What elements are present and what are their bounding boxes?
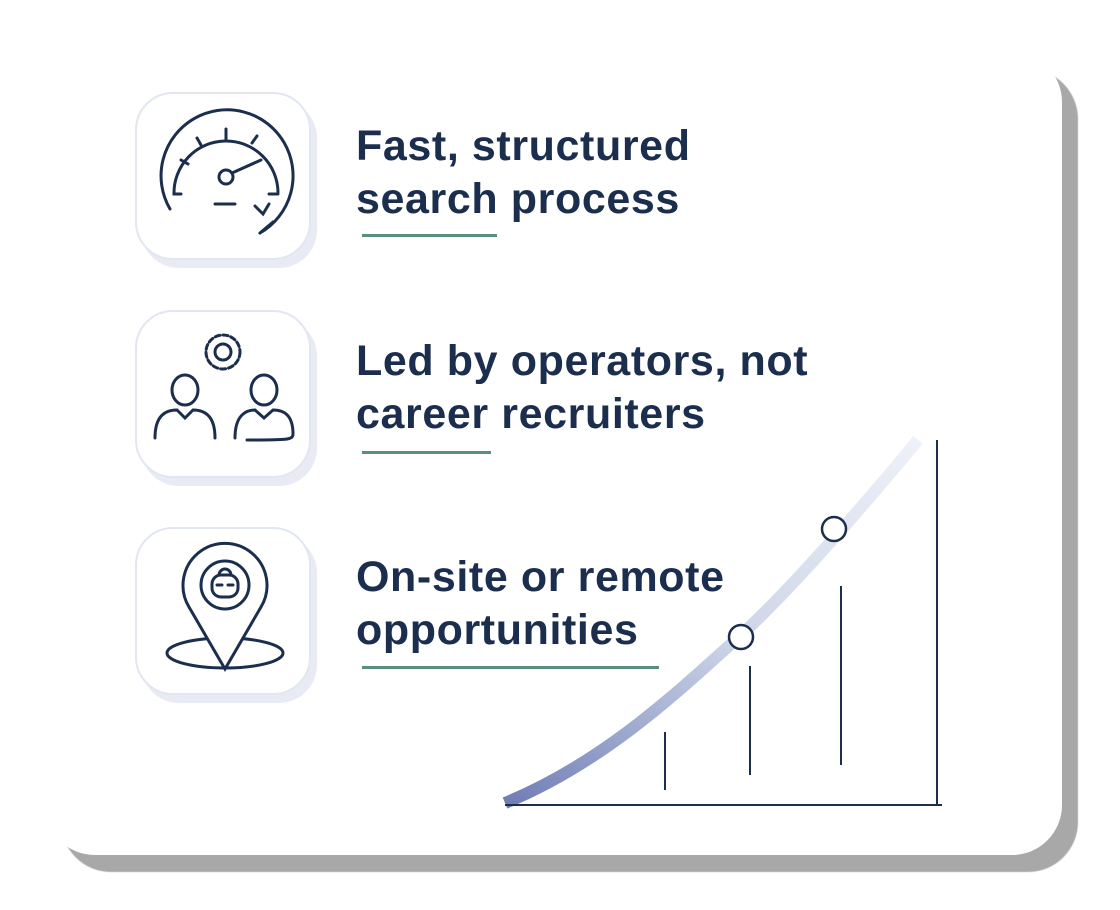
- heading 1: [356, 122, 691, 223]
- heading 2: Led by operators, not: [356, 337, 808, 385]
- heading 3: [356, 553, 725, 654]
- heading 1: search process: [356, 175, 680, 223]
- icon tile: speedometer: [135, 92, 311, 260]
- heading 3: On-site or remote: [356, 553, 725, 601]
- heading 2: [356, 337, 808, 438]
- icon tile: location pin: [135, 527, 311, 695]
- underline 2: [362, 451, 491, 454]
- heading 2: career recruiters: [356, 390, 706, 438]
- underline 3: [362, 666, 659, 669]
- growth chart: [502, 436, 942, 808]
- heading 3: opportunities: [356, 606, 638, 654]
- icon tile: team with gear: [135, 310, 311, 478]
- heading 1: Fast, structured: [356, 122, 691, 170]
- underline 1: [362, 234, 497, 237]
